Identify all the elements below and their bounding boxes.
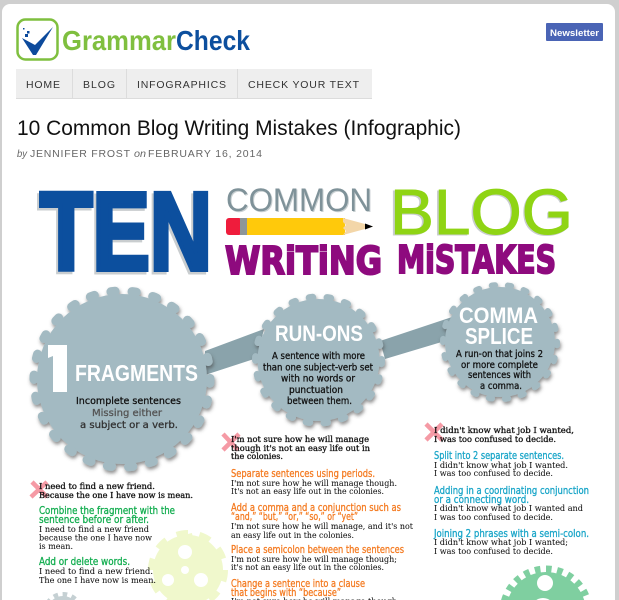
wrong example: Because the one I have now is mean. [39, 491, 193, 501]
example text: I didn't know what job I wanted. [434, 461, 568, 471]
wrong example: I need to find a new friend. [39, 482, 155, 492]
gear description: Missing either [92, 408, 163, 419]
wrong example: I didn't know what job I wanted, [434, 426, 574, 436]
fix: coordinating conjunction: or a connecting word. [434, 494, 529, 506]
gear description: A run-on that joins 2 [456, 349, 543, 360]
wrong example [39, 482, 193, 501]
icon: check mark badge [18, 20, 58, 60]
wrong example: I was too confused to decide. [434, 435, 556, 445]
gear heading: RUN-ONS [275, 321, 363, 346]
example text: it's not an easy life out in the colonies. [231, 563, 384, 573]
newsletter button [546, 23, 603, 41]
fix: comma and conjunction: “and,” “but,” “or,” “so,” or “yet” [231, 511, 358, 523]
page title: 10 Common Blog Writing Mistakes (Infographic) [17, 117, 461, 140]
navigation bar: CHECK YOUR TEXT [248, 79, 360, 91]
byline: on [134, 148, 146, 160]
example text [434, 538, 568, 557]
heading words: WRITING MISTAKES: WRiTiNG [225, 239, 382, 283]
navigation bar: INFOGRAPHICS [137, 79, 226, 91]
wrong example [434, 426, 574, 445]
byline: FEBRUARY 16, 2014 [148, 148, 262, 160]
heading word: COMMON: COMMON [226, 182, 372, 218]
logo wordmark: Grammar [62, 25, 176, 56]
fix: combine fragment: Combine the fragment with the [39, 505, 175, 517]
fix: clause with because: Change a sentence into a clause [231, 578, 365, 590]
heading word: TEN: TEN [40, 170, 212, 294]
heading word: TEN: TEN [38, 173, 210, 296]
gear description: Incomplete sentences [76, 396, 181, 407]
navigation bar: HOME [26, 79, 60, 91]
wrong example: I'm not sure how he will manage [231, 435, 369, 445]
gear description: or more complete [461, 360, 538, 371]
gear heading: SPLICE [465, 323, 533, 349]
example text: I need to find a new friend. [39, 567, 153, 577]
example text: I'm not sure how he will manage though; [231, 555, 397, 565]
heading word: BLOG: BLOG [390, 176, 573, 248]
gear description [263, 351, 373, 407]
fix: split sentences: Split into 2 separate sentences. [434, 450, 564, 462]
byline [17, 148, 262, 160]
gear heading: COMMA [459, 303, 538, 328]
heading words: WRITING MISTAKES [225, 238, 556, 283]
decorative gear: small grey [47, 592, 76, 600]
gear shape [443, 285, 557, 399]
newsletter button: Newsletter [550, 28, 599, 39]
decorative gear: green [501, 566, 589, 600]
wrong example: the colonies. [231, 452, 283, 462]
gear heading: FRAGMENTS [75, 360, 198, 386]
gear description: a comma. [480, 381, 522, 392]
logo wordmark [62, 25, 250, 56]
example text [39, 567, 156, 586]
byline: JENNIFER FROST [30, 148, 131, 160]
fix: combine fragment: sentence before or after. [39, 514, 149, 526]
example text: I was too confused to decide. [434, 513, 553, 523]
column: comma splice examples [426, 424, 589, 557]
example text [434, 504, 583, 523]
example text: is mean. [39, 542, 73, 552]
fix: separate sentences: Separate sentences using periods. [231, 468, 375, 480]
example text [231, 522, 414, 541]
heading word: COMMON: COMMON [227, 183, 373, 219]
column: run-ons examples [222, 432, 414, 600]
wrong example: though it's not an easy life out in [231, 444, 370, 454]
example text [231, 555, 397, 573]
example text: It's not an easy life out in the colonies. [231, 487, 384, 497]
gear description: with no words or [281, 374, 356, 384]
fix: clause with because: that begins with “because” [231, 587, 341, 599]
infographic heading [38, 170, 573, 296]
example text [434, 461, 568, 479]
gear description [76, 396, 181, 431]
example text: because the one I have now [39, 534, 153, 544]
wrong example [231, 435, 370, 462]
example text [39, 525, 153, 552]
fix: comma and conjunction [231, 502, 401, 523]
connector band: fragments to run-ons [205, 329, 264, 375]
gear panel: run-ons [256, 297, 382, 423]
logo wordmark: Check [176, 25, 250, 56]
gear description [456, 349, 543, 392]
example text: I was too confused to decide. [434, 547, 553, 557]
heading words: WRITING MISTAKES: MiSTAKES [397, 238, 556, 282]
navigation bar [16, 69, 372, 99]
gear description: a subject or a verb. [80, 420, 178, 431]
example text: I need to find a new friend [39, 525, 149, 535]
fix: coordinating conjunction [434, 485, 589, 506]
connector band: run-ons to comma splice [380, 317, 452, 359]
icon: red cross [31, 482, 47, 497]
gear description: between them. [287, 396, 352, 407]
gear panel: fragments [34, 291, 210, 467]
fix: add or delete words: Add or delete words. [39, 556, 130, 568]
byline: by [17, 148, 28, 160]
icon: pencil [226, 218, 373, 235]
example text: I was too confused to decide. [434, 469, 553, 479]
example text: I'm not sure how he will manage though. [231, 479, 397, 489]
example text: The one I have now is mean. [39, 576, 156, 586]
gear panel: comma splice [443, 285, 557, 399]
fix: clause with because [231, 578, 365, 599]
gear shape [256, 297, 382, 423]
heading word: BLOG: BLOG [388, 177, 572, 249]
icon: red cross [426, 424, 442, 440]
decorative gear: pale yellow [148, 530, 228, 600]
example text: I didn't know what job I wanted and [434, 504, 583, 514]
icon: red cross [223, 434, 239, 450]
fix: semi-colon: Joining 2 phrases with a semi-colon. [433, 528, 589, 540]
gear description: than one subject-verb set [263, 362, 373, 374]
logo: GrammarCheck [18, 20, 250, 60]
number 1 [48, 345, 67, 392]
column: fragments examples [31, 482, 193, 586]
navigation bar: BLOG [83, 79, 115, 91]
gear description: punctuation [289, 385, 343, 396]
example text: I didn't know what job I wanted; [434, 538, 568, 548]
example text [231, 479, 397, 497]
gear shape [34, 291, 210, 467]
gear heading [459, 303, 538, 349]
example text: an easy life out in the colonies. [231, 531, 354, 541]
fix: combine fragment [39, 505, 175, 526]
gear description: sentences with [468, 370, 531, 381]
gear description: A sentence with more [272, 351, 365, 362]
